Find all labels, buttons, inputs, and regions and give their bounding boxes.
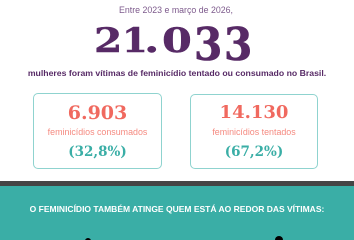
label: feminicídios tentados: feminicídios tentados xyxy=(212,127,296,137)
headline number: 3 xyxy=(194,17,222,71)
icon: person right head xyxy=(275,236,283,240)
headline number: 2 xyxy=(94,20,122,60)
panel: consumados xyxy=(33,93,162,169)
number: 6.903: 6.903 xyxy=(68,102,127,124)
headline number: . xyxy=(144,20,159,60)
headline number: 3 xyxy=(224,17,252,71)
intro text: Entre 2023 e março de 2026, xyxy=(119,5,233,15)
percent: 67,2%: (67,2%) xyxy=(225,144,283,160)
headline number: 1 xyxy=(122,20,148,60)
label: feminicídios consumados: feminicídios consumados xyxy=(48,127,147,137)
headline number xyxy=(94,17,252,71)
dark divider band xyxy=(0,181,354,187)
number: 14.130: 14.130 xyxy=(220,102,288,123)
subtitle: mulheres foram vítimas de feminicídio tentado ou consumado no Brasil. xyxy=(28,68,326,78)
panel: tentados xyxy=(190,94,318,169)
headline number: 0 xyxy=(162,20,192,60)
percent: 32,8%: (32,8%) xyxy=(68,144,127,160)
teal panel heading: O FEMINICÍDIO TAMBÉM ATINGE QUEM ESTÁ AO REDOR DAS VÍTIMAS: xyxy=(30,204,324,214)
teal panel xyxy=(0,186,354,240)
icon: person left head xyxy=(85,238,91,240)
